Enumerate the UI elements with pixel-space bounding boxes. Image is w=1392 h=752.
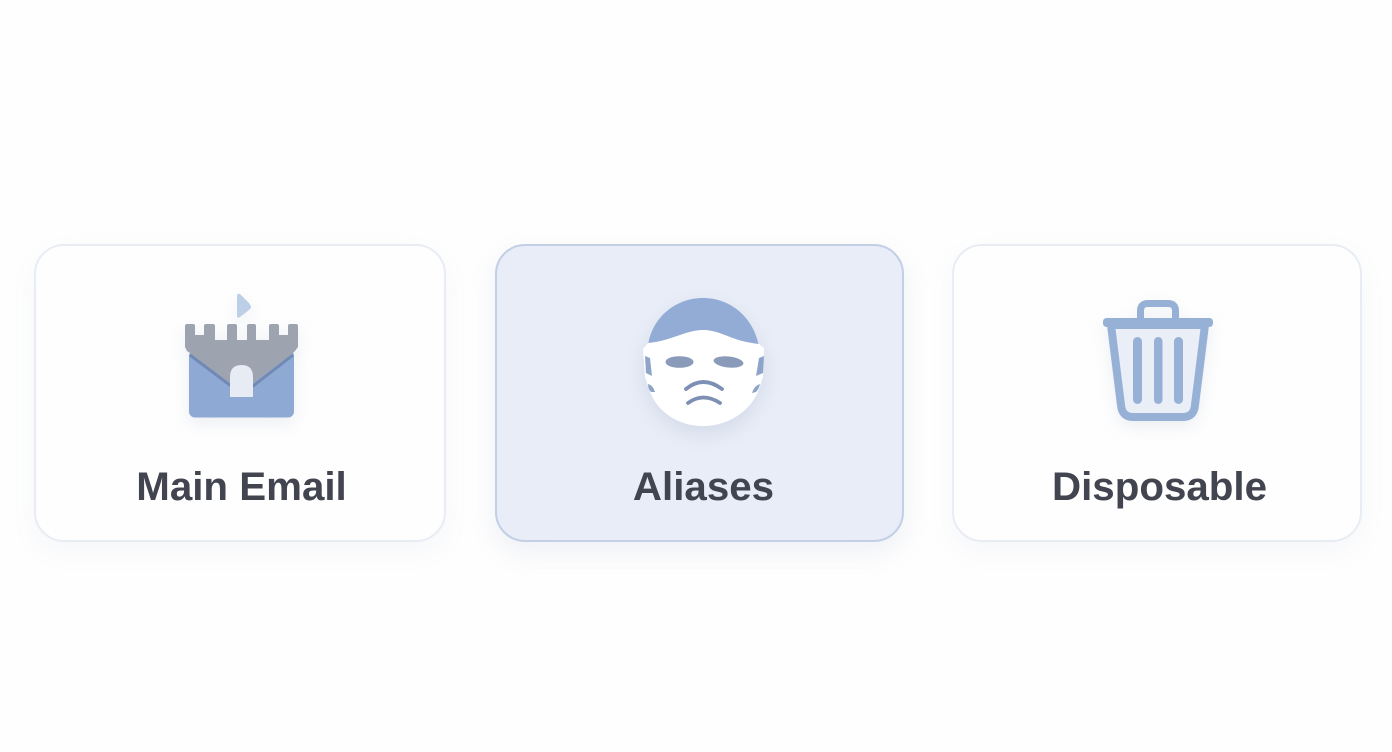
panel: disposable bbox=[952, 244, 1362, 542]
panel: aliases bbox=[495, 244, 904, 542]
label: disposable: Disposable bbox=[1052, 464, 1267, 509]
label: main email: Main Email bbox=[136, 464, 347, 509]
panel: main email bbox=[34, 244, 446, 542]
label: aliases: Aliases bbox=[633, 464, 774, 509]
